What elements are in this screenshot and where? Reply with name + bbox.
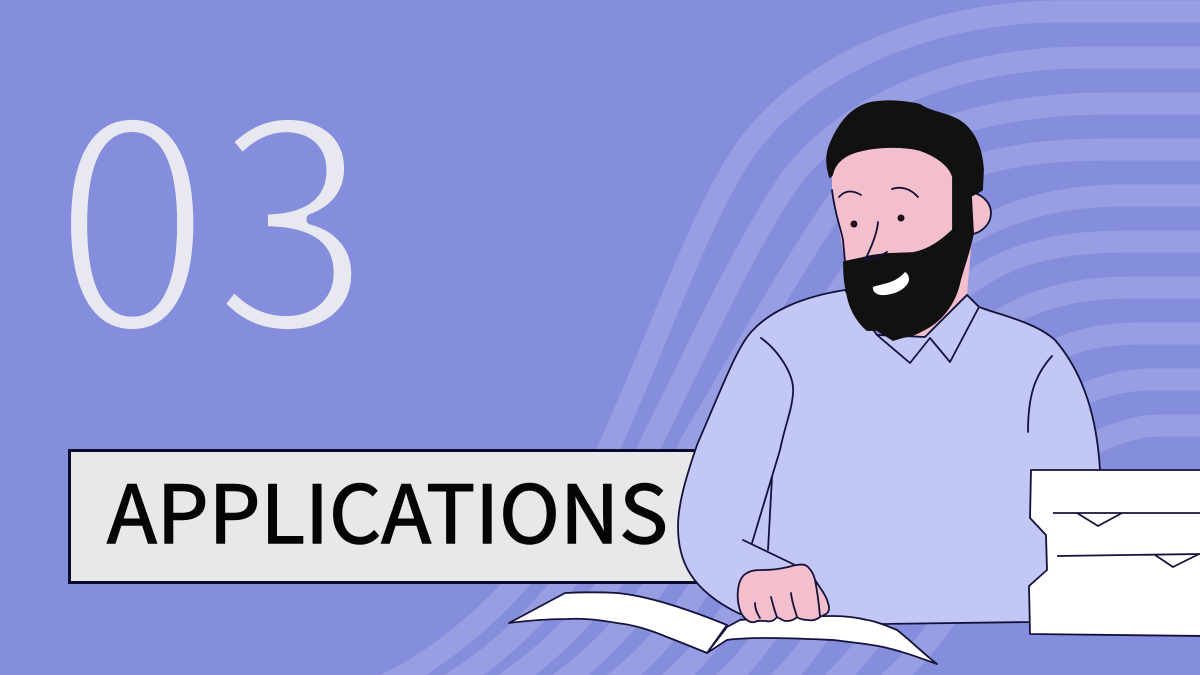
title text: APPLICATIONS <box>107 451 668 567</box>
title box <box>70 450 730 582</box>
neck <box>880 225 973 340</box>
man illustration <box>678 101 1100 624</box>
sweater body <box>678 290 1100 624</box>
brows and nose <box>839 188 918 260</box>
hair and beard <box>827 101 983 340</box>
eyes <box>850 214 904 228</box>
smile <box>873 272 909 295</box>
sweater fold lines <box>743 338 1052 565</box>
jaw line <box>832 190 845 262</box>
collar <box>877 295 979 363</box>
hand <box>738 565 829 622</box>
face <box>832 130 958 265</box>
ear <box>970 193 991 234</box>
stack of papers <box>1029 470 1200 636</box>
open book <box>509 592 937 664</box>
number 03: 03 <box>52 0 372 416</box>
